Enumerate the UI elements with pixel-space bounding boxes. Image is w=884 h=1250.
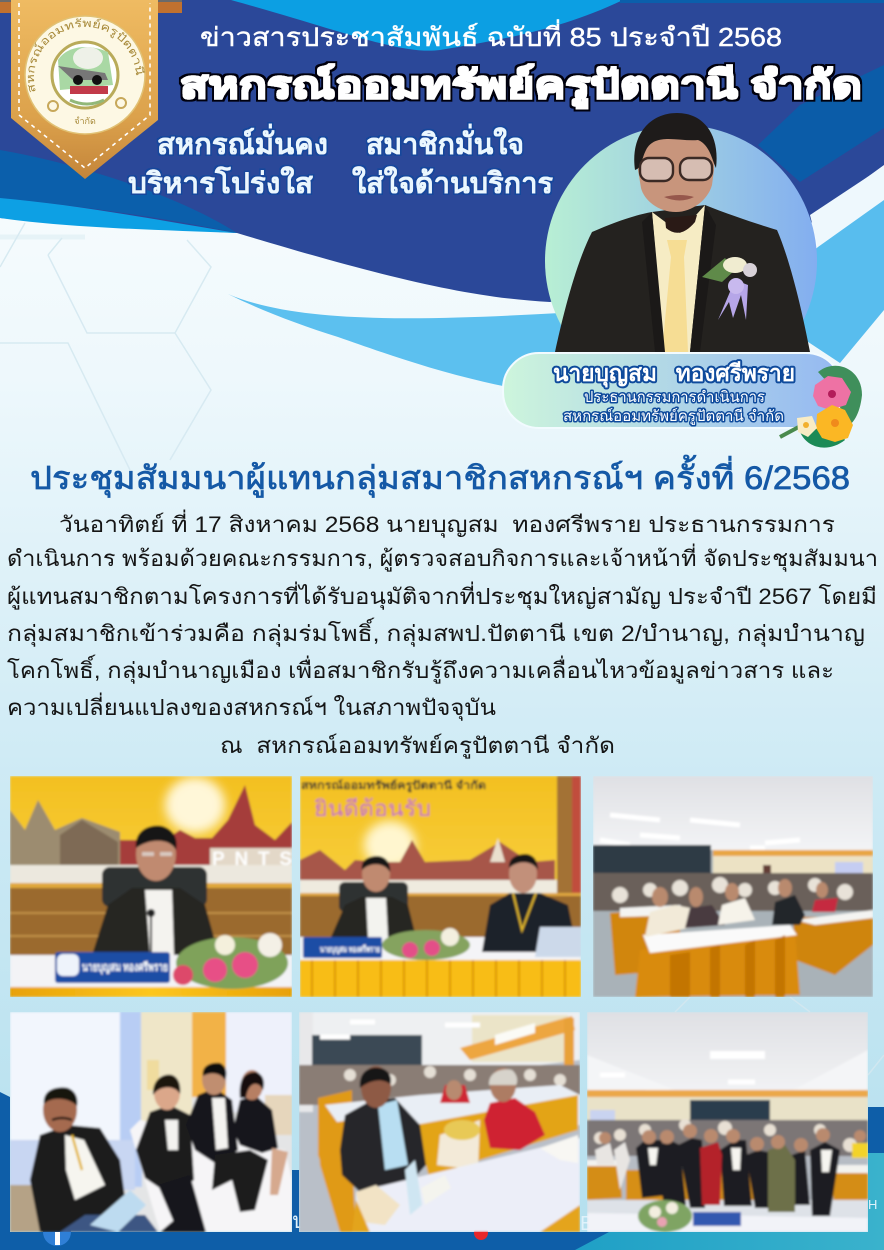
header wave background (0, 0, 884, 395)
photo 1: chairman at desk: นายบุญสม ทองศรีพราย (82, 960, 168, 975)
icon: tropical flowers (780, 366, 862, 448)
photo 2: chairman with staff: นายบุญสม ทองศรีพราย (320, 944, 380, 955)
badge: gold ribbon with seal (0, 0, 182, 179)
photo 2: chairman with staff: สหกรณ์ออมทรัพย์ครูปัตตานี จำกัด (301, 779, 486, 793)
tagline block (128, 124, 553, 200)
seal: จำกัด (74, 116, 96, 126)
title: cooperative name: สหกรณ์ออมทรัพย์ครูปัตตานี จำกัด (180, 64, 862, 109)
photo 5: members at seminar tables (299, 1012, 580, 1232)
body text block: ณ สหกรณ์ออมทรัพย์ครูปัตตานี จำกัด (220, 733, 615, 759)
heading: seminar title: ประชุมสัมมนาผู้แทนกลุ่มสมาชิกสหกรณ์ฯ ครั้งที่ 6/2568 (30, 455, 850, 498)
footer band (0, 1092, 884, 1250)
seal: สหกรณ์ออมทรัพย์ครูปัตตานี (28, 18, 146, 92)
tagline block: ใส่ใจด้านบริการ (352, 166, 553, 200)
photo 2: chairman with staff (300, 776, 581, 997)
name tag panel (503, 353, 842, 428)
photo 6: group photo (587, 1012, 868, 1232)
body text block: ผู้แทนสมาชิกตามโครงการที่ได้รับอนุมัติจากที่ประชุมใหญ่สามัญ ประจำปี 2567 โดยมี (7, 581, 877, 610)
header line: newsletter issue: ข่าวสารประชาสัมพันธ์ ฉบับที่ 85 ประจำปี 2568 (200, 19, 782, 52)
tagline block: บริหารโปร่งใส (128, 166, 313, 200)
footer band: H (868, 1197, 877, 1212)
chairman role: สหกรณ์ออมทรัพย์ครูปัตตานี จำกัด (563, 408, 784, 425)
chairman name: นายบุญสม ทองศรีพราย (553, 360, 795, 388)
body text block: วันอาทิตย์ ที่ 17 สิงหาคม 2568 นายบุญสม ทองศรีพราย ประธานกรรมการ (59, 509, 835, 538)
tagline block: สมาชิกมั่นใจ (366, 124, 524, 161)
seal (24, 15, 146, 135)
body text block: กลุ่มสมาชิกเข้าร่วมคือ กลุ่มร่มโพธิ์, กลุ่มสพป.ปัตตานี เขต 2/บำนาญ, กลุ่มบำนาญ (7, 618, 865, 647)
photo 3: seminar audience (593, 776, 873, 997)
portrait circle and chairman photo (545, 113, 817, 397)
footer band: B (580, 1213, 593, 1235)
body text block: โคกโพธิ์, กลุ่มบำนาญเมือง เพื่อสมาชิกรับรู้ถึงความเคลื่อนไหวข้อมูลข่าวสาร และ (7, 655, 834, 684)
body text block: ดำเนินการ พร้อมด้วยคณะกรรมการ, ผู้ตรวจสอบกิจการและเจ้าหน้าที่ จัดประชุมสัมมนา (7, 543, 878, 572)
body text block (7, 509, 878, 759)
photo 2: chairman with staff: PNTSC (414, 880, 483, 895)
photo 1: chairman at desk: PNTS (212, 849, 292, 870)
photo 4: four members seated (10, 1012, 292, 1232)
chairman role (563, 389, 784, 425)
background hexagon pattern (0, 223, 884, 1075)
photo 2: chairman with staff: ยินดีต้อนรับ (314, 796, 431, 821)
tagline block: สหกรณ์มั่นคง (157, 124, 328, 161)
footer band: ป (292, 1208, 306, 1233)
body text block: ความเปลี่ยนแปลงของสหกรณ์ฯ ในสภาพปัจจุบัน (7, 692, 496, 721)
chairman role: ประธานกรรมการดำเนินการ (584, 389, 765, 406)
photo 1: chairman at desk (10, 776, 292, 997)
icon: corsage (702, 257, 757, 320)
